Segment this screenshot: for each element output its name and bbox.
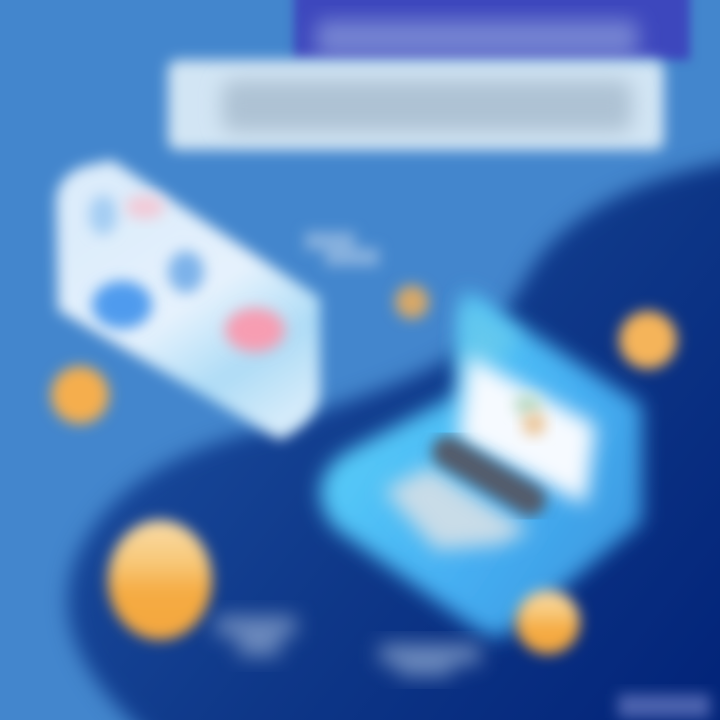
subtitle text block bbox=[222, 80, 632, 132]
small floating label bbox=[305, 232, 379, 266]
dark navy wave bbox=[56, 150, 720, 720]
coin: right bbox=[619, 311, 677, 369]
laptop screen bbox=[458, 355, 596, 505]
isometric dashboard card bbox=[56, 160, 320, 440]
keyboard bbox=[448, 452, 530, 500]
laptop base bbox=[384, 466, 530, 550]
corner mark bbox=[618, 694, 710, 718]
coin: bottom right bbox=[516, 590, 580, 654]
light blue laptop platform bbox=[320, 290, 642, 637]
header bar bbox=[288, 0, 696, 66]
coin: large bbox=[108, 520, 212, 640]
coin: left bbox=[51, 366, 109, 424]
header text line bbox=[316, 20, 638, 56]
subtitle panel bbox=[168, 60, 664, 150]
screen chart bbox=[514, 394, 542, 416]
platform top highlight bbox=[460, 300, 520, 370]
chart marks bbox=[89, 195, 117, 235]
label near large coin bbox=[216, 616, 296, 656]
laptop bbox=[384, 355, 596, 550]
bottom label bbox=[380, 644, 480, 676]
coin: small centre bbox=[395, 285, 429, 319]
